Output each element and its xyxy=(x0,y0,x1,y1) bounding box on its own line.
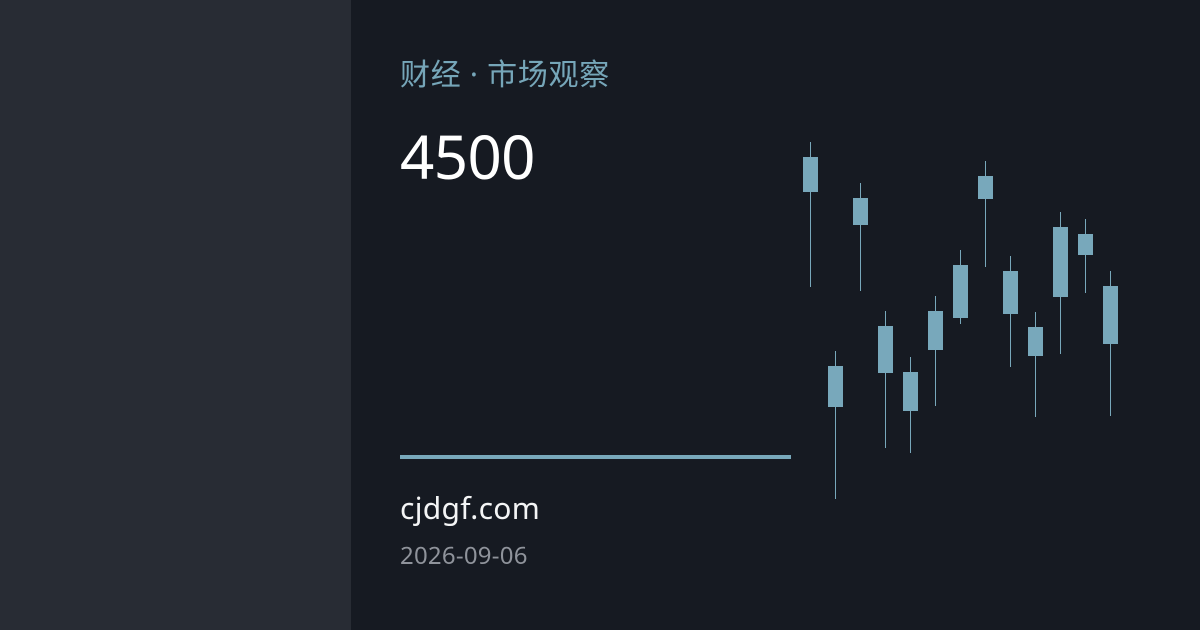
site domain: cjdgf.com xyxy=(400,487,540,528)
accent rule xyxy=(400,455,791,459)
title number: 4500 xyxy=(400,115,535,197)
eyebrow heading: 财经 · 市场观察 xyxy=(400,53,610,94)
date: 2026-09-06 xyxy=(400,539,528,572)
panel: left sidebar xyxy=(0,0,351,630)
